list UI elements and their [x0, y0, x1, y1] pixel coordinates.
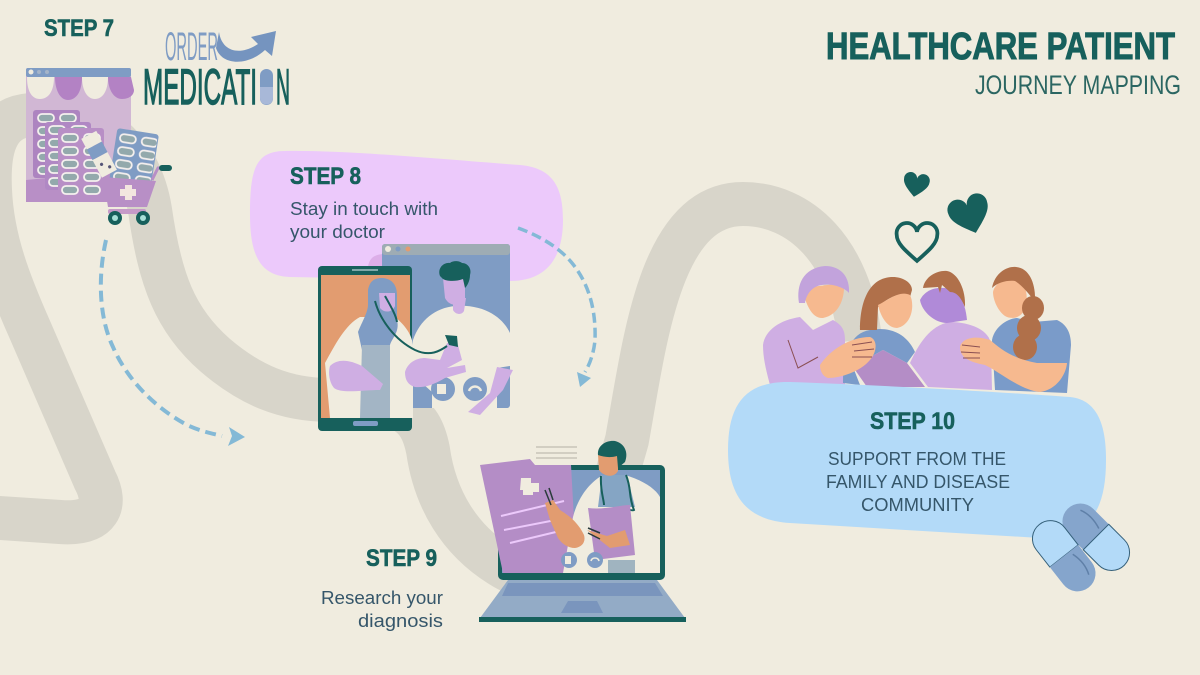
title — [826, 26, 1181, 100]
order medication logo — [143, 25, 290, 115]
illustration: telehealth phone and patient window — [318, 244, 513, 431]
illustration: family group hug — [763, 266, 1071, 393]
person three — [910, 271, 992, 390]
step 10 text: SUPPORT FROM THE — [828, 449, 1006, 469]
step 10 heading: STEP 10 — [870, 408, 955, 435]
step 10 text — [826, 449, 1010, 515]
step 8 text — [290, 199, 438, 242]
panel: step 10 blob — [728, 382, 1106, 538]
winding journey road — [0, 115, 860, 577]
person two — [843, 277, 925, 387]
icon: capsules — [1025, 496, 1137, 599]
step 8 text: Stay in touch with — [290, 199, 438, 219]
phone with doctor — [318, 266, 413, 431]
person one — [763, 266, 849, 385]
step 9 text: Research your — [321, 588, 443, 608]
arrow: step 8 to step 9 — [518, 228, 595, 387]
order medication logo: MEDICATI — [143, 59, 257, 115]
arrow: step 7 to step 8 — [101, 240, 245, 446]
step 8 text: your doctor — [290, 222, 385, 242]
shopping cart — [103, 165, 172, 225]
laptop base — [479, 580, 686, 622]
person four — [992, 267, 1071, 393]
medicine bottle — [81, 131, 117, 178]
icon: pharmacy shop with cart — [26, 68, 172, 225]
step 10 text: FAMILY AND DISEASE — [826, 472, 1010, 492]
step 9 heading: STEP 9 — [366, 545, 437, 572]
step 9 text: diagnosis — [358, 611, 443, 631]
icon: hearts — [897, 171, 995, 261]
hugging arms — [820, 337, 1067, 392]
patient arm and stethoscope — [405, 343, 466, 387]
step 9 text — [321, 588, 443, 631]
step 7 heading: STEP 7 — [44, 15, 114, 42]
medical record paper — [480, 447, 577, 573]
blister packs — [33, 110, 159, 197]
illustration: laptop with doctor — [479, 441, 686, 622]
laptop screen — [498, 465, 665, 580]
panel: step 8 blob — [250, 151, 563, 281]
step 8 heading: STEP 8 — [290, 163, 361, 190]
patient window — [382, 244, 513, 415]
step 10 text: COMMUNITY — [861, 495, 974, 515]
doctor figure — [545, 441, 660, 573]
infographic canvas: N — [276, 59, 290, 115]
order medication logo: ORDER — [165, 25, 218, 69]
